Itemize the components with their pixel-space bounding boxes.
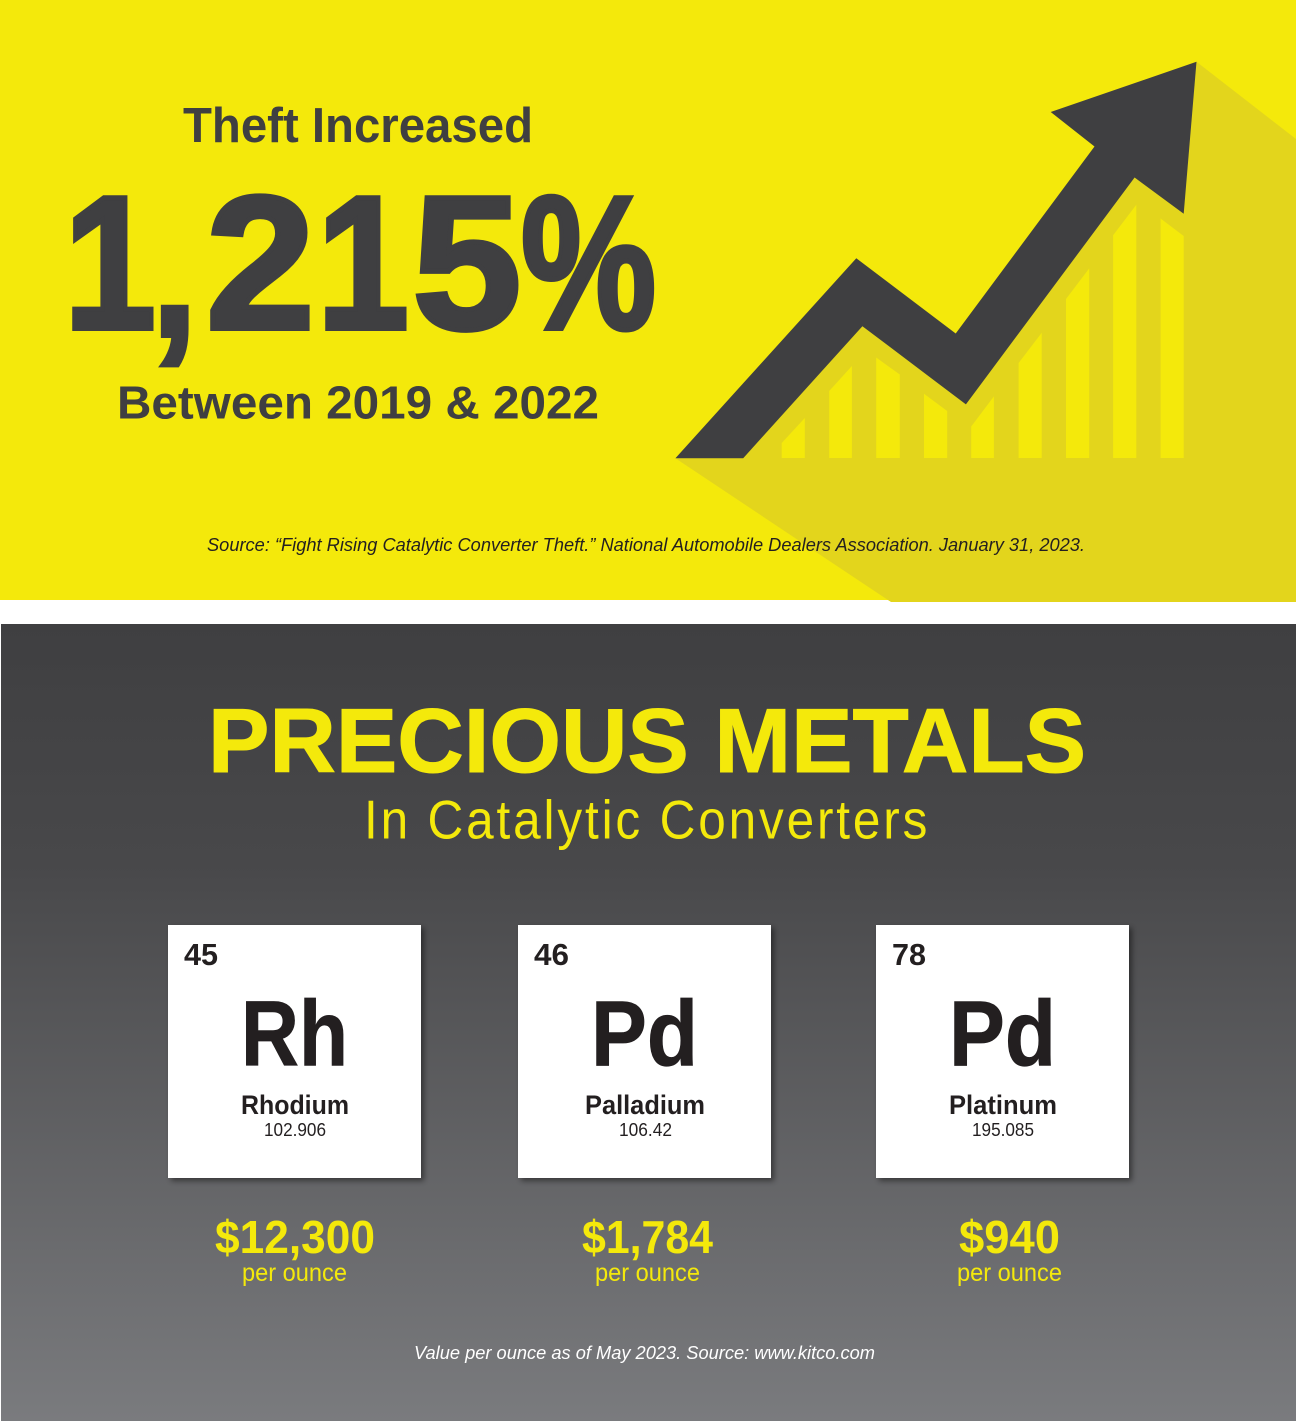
icon: rising arrow	[675, 62, 1196, 458]
card: rhodium	[168, 925, 421, 1178]
panel: theft statistic	[0, 0, 1296, 602]
big number: 1,215%: 1	[64, 157, 156, 369]
big number: 1,215%: 2	[206, 156, 315, 369]
heading: theft increased: Theft Increased	[183, 99, 533, 153]
card: palladium: 106.42	[619, 1120, 672, 1140]
source note: Source: “Fight Rising Catalytic Converter Theft.” National Automobile Dealers Association. January 31, 2023.	[207, 535, 1085, 555]
card: rhodium: Rhodium	[241, 1090, 349, 1120]
price: platinum	[957, 1211, 1062, 1287]
big number: 1,215%: 1	[317, 157, 409, 369]
card: platinum: Platinum	[949, 1090, 1057, 1120]
big number: 1,215%: %	[521, 157, 656, 369]
subheading: date range: Between 2019 & 2022	[117, 376, 599, 428]
card: palladium: Palladium	[585, 1090, 705, 1120]
yellow background	[0, 0, 1296, 600]
big number: 1,215%	[64, 156, 656, 376]
footnote: Value per ounce as of May 2023. Source: www.kitco.com	[414, 1343, 875, 1363]
card: rhodium: 45	[184, 937, 218, 972]
price: rhodium: per ounce	[242, 1259, 347, 1287]
card: platinum: 78	[892, 937, 926, 972]
card: palladium	[518, 925, 771, 1178]
card: palladium: 46	[534, 937, 569, 972]
panel: precious metals	[1, 624, 1296, 1421]
card: palladium: Pd	[591, 982, 698, 1086]
price: platinum: $940	[959, 1211, 1060, 1263]
title: PRECIOUS METALS	[208, 691, 1086, 792]
big number: 1,215%: ,	[152, 164, 197, 376]
price: rhodium	[215, 1211, 375, 1287]
card: platinum: Pd	[949, 982, 1056, 1086]
big number: 1,215%: 5	[412, 156, 521, 369]
subtitle: In Catalytic Converters	[364, 790, 927, 851]
dark gradient background	[1, 624, 1296, 1421]
bar chart	[782, 205, 1184, 458]
card: rhodium: 102.906	[264, 1120, 326, 1140]
long shadow of arrow	[675, 62, 1296, 602]
price: rhodium: $12,300	[215, 1211, 375, 1263]
price: palladium: $1,784	[582, 1211, 713, 1263]
card: platinum: 195.085	[972, 1120, 1034, 1140]
price: palladium	[582, 1211, 713, 1287]
price: platinum: per ounce	[957, 1259, 1062, 1287]
card: platinum	[876, 925, 1129, 1178]
price: palladium: per ounce	[595, 1259, 700, 1287]
card: rhodium: Rh	[241, 982, 348, 1086]
